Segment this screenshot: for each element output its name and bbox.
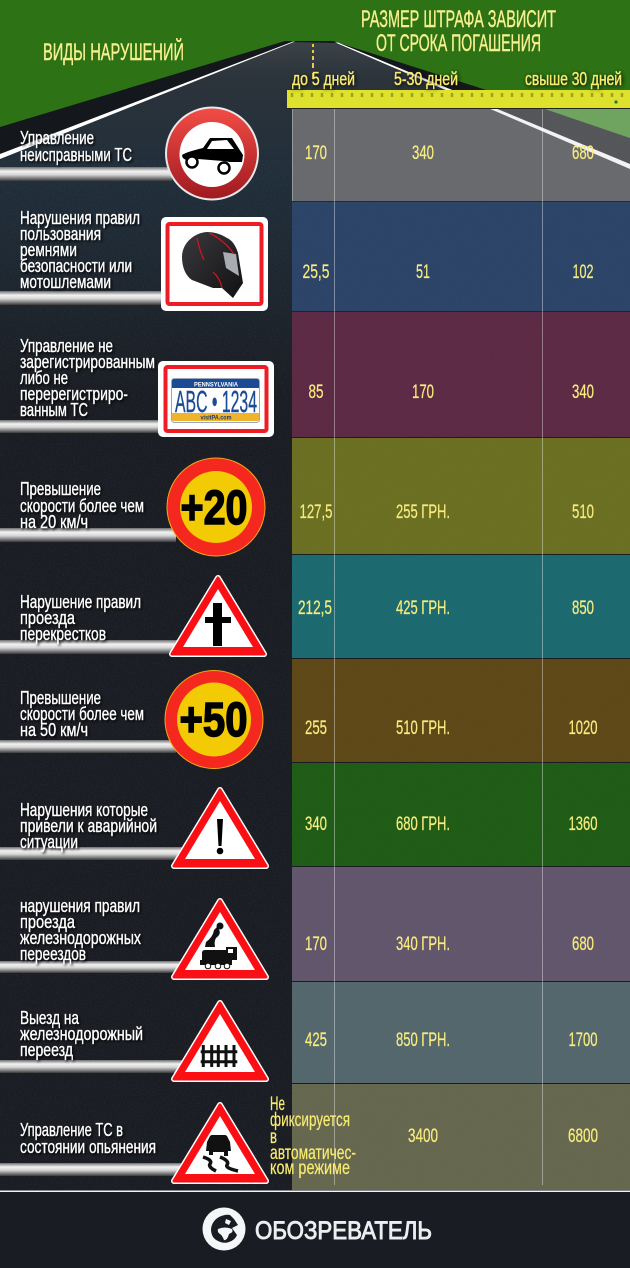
- violation labels: нарушения правил: [20, 896, 140, 916]
- violation labels: Управление ТС в: [20, 1120, 123, 1140]
- icon: no cars sign: [165, 106, 259, 200]
- violation labels: Превышение: [20, 479, 101, 499]
- icon: licence plate sign: visitPA.com: [200, 416, 232, 422]
- icon: +20 speed sign: +20: [180, 482, 248, 535]
- violation labels: Управление не: [20, 336, 113, 356]
- violation labels: либо не: [20, 368, 68, 388]
- fine values: 51: [416, 261, 430, 283]
- fine values: 425 ГРН.: [396, 597, 450, 619]
- icon: licence plate sign: [158, 361, 274, 437]
- column headings: 5-30 дней: [394, 69, 458, 89]
- violation labels: на 50 км/ч: [20, 720, 88, 740]
- violation labels: перерегистриро-: [20, 384, 128, 404]
- icon: railway crossing with locomotive sign: [174, 901, 266, 977]
- fine values: 255: [305, 717, 327, 739]
- icon: licence plate sign: PENNSYLVANIA: [194, 382, 238, 388]
- violation labels: железнодорожный: [20, 1024, 143, 1044]
- fine values: 85: [308, 381, 324, 403]
- divider above footer: [0, 1190, 630, 1192]
- fine values: 1700: [568, 1029, 598, 1051]
- violation labels: Нарушения которые: [20, 800, 148, 820]
- footer logo: [202, 1208, 432, 1250]
- violation labels: ремнями: [20, 240, 77, 260]
- violation labels: мотошлемами: [20, 272, 111, 292]
- fine values: 255 ГРН.: [396, 501, 450, 523]
- violation labels: проезда: [20, 608, 76, 628]
- note: not recorded automatically: [270, 1094, 356, 1179]
- heading: types of violations: ВИДЫ НАРУШЕНИЙ: [43, 38, 184, 66]
- violation labels: скорости более чем: [20, 704, 144, 724]
- violation labels: на 20 км/ч: [20, 512, 88, 532]
- fine values: 212,5: [298, 597, 332, 619]
- violation labels: пользования: [20, 224, 101, 244]
- icon: +50 speed sign: +50: [180, 694, 248, 747]
- icon: slippery road sign: [174, 1105, 266, 1181]
- violation labels: Выезд на: [20, 1008, 80, 1028]
- icon: railway crossing fence sign: [174, 1003, 266, 1079]
- fine values: 510: [572, 501, 594, 523]
- fine values: 127,5: [300, 501, 333, 523]
- fine values: 1360: [568, 813, 598, 835]
- fine values: 6800: [568, 1125, 598, 1147]
- violation labels: проезда: [20, 912, 76, 932]
- fine values: 170: [305, 142, 327, 164]
- fine values: 340 ГРН.: [396, 933, 450, 955]
- violation labels: Нарушение правил: [20, 592, 141, 612]
- fine values: 680 ГРН.: [396, 813, 450, 835]
- violation labels: Нарушения правил: [20, 208, 140, 228]
- violation labels: перекрестков: [20, 624, 106, 644]
- note: not recorded automatically: фиксируется: [270, 1110, 350, 1131]
- ruler: [287, 90, 630, 109]
- column headings: [292, 69, 622, 89]
- fine values: 680: [572, 933, 594, 955]
- note: not recorded automatically: в: [270, 1127, 277, 1148]
- fine values: 102: [572, 261, 594, 283]
- violation labels: Управление: [20, 128, 94, 148]
- fine values: 680: [572, 142, 594, 164]
- violation labels: ванным ТС: [20, 400, 88, 420]
- violation labels: зарегистрированным: [20, 352, 155, 372]
- fine values: 510 ГРН.: [396, 717, 450, 739]
- column headings: до 5 дней: [292, 69, 355, 89]
- icon: danger warning sign: [174, 790, 266, 866]
- fine values: 425: [305, 1029, 327, 1051]
- violation labels: привели к аварийной: [20, 816, 157, 836]
- fine values: 340: [305, 813, 327, 835]
- icon: +50 speed sign: [164, 670, 264, 769]
- violation labels: скорости более чем: [20, 496, 144, 516]
- heading: fine size: [361, 6, 556, 57]
- fine values: 850 ГРН.: [396, 1029, 450, 1051]
- icon: helmet sign: [161, 217, 268, 311]
- violation labels: неисправными ТС: [20, 145, 132, 165]
- violation labels: железнодорожных: [20, 928, 141, 948]
- pointer tubes: [0, 167, 182, 1176]
- fine values: 170: [412, 381, 434, 403]
- footer logo: ОБОЗРЕВАТЕЛЬ: [255, 1217, 432, 1245]
- violation labels: безопасности или: [20, 256, 132, 276]
- icon: licence plate sign: ABC • 1234: [175, 384, 257, 419]
- icon: crossroads warning sign: [172, 578, 264, 654]
- fine values: 170: [305, 933, 327, 955]
- violation labels: [20, 128, 157, 1157]
- violation labels: состоянии опьянения: [20, 1137, 156, 1157]
- note: not recorded automatically: автоматичес-: [270, 1143, 356, 1164]
- fine values: 850: [572, 597, 594, 619]
- fine values: 1020: [568, 717, 598, 739]
- fine values: 340: [572, 381, 594, 403]
- icon: +20 speed sign: [166, 458, 266, 556]
- note: not recorded automatically: ком режиме: [270, 1158, 350, 1179]
- fine values: 25,5: [302, 261, 330, 283]
- violation labels: переездов: [20, 944, 86, 964]
- table rows: [292, 108, 630, 1190]
- violation labels: ситуации: [20, 832, 78, 852]
- violation labels: переезд: [20, 1040, 73, 1060]
- fine values: [298, 142, 598, 1147]
- fine values: 3400: [408, 1125, 438, 1147]
- fine values: 340: [412, 142, 434, 164]
- note: not recorded automatically: Не: [270, 1094, 285, 1115]
- violation labels: Превышение: [20, 688, 101, 708]
